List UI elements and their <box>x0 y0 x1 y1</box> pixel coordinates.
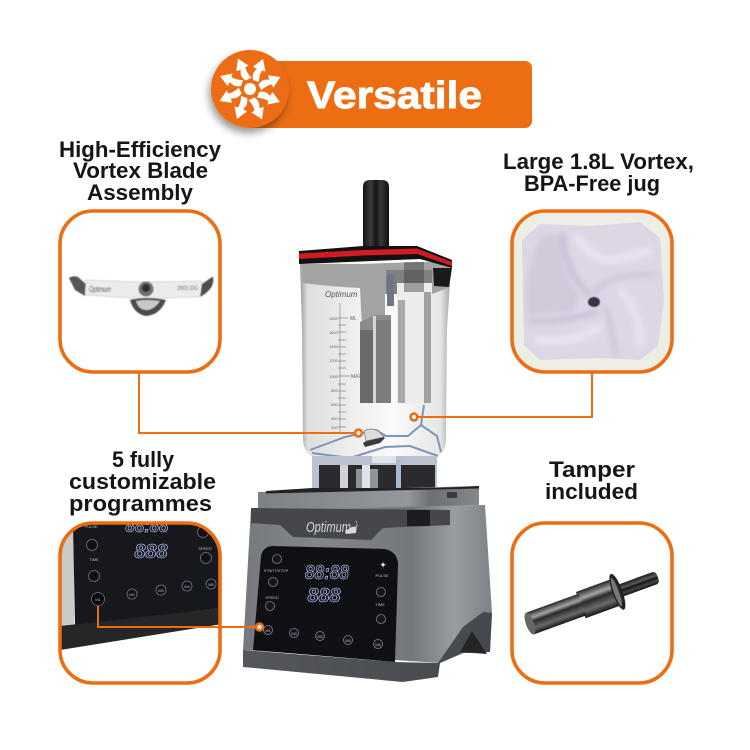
heading: blade <box>59 137 222 205</box>
panel frame: jug <box>512 211 672 372</box>
measuring scale: 200 <box>331 425 338 430</box>
measuring scale: ML <box>350 316 357 322</box>
jug <box>299 246 452 488</box>
jug base collar <box>312 456 437 488</box>
connector: programmes <box>98 606 256 627</box>
heading: programmes: programmes <box>69 491 212 516</box>
panel: tamper <box>512 457 672 683</box>
close-up labels: TIME <box>89 557 99 562</box>
close-up labels <box>84 524 215 602</box>
panel labels: M3 <box>317 634 324 639</box>
panel labels: M1 <box>265 628 272 633</box>
base logo: Optimum <box>306 519 351 536</box>
close-up labels: M4 <box>184 584 191 589</box>
base skirt <box>243 612 492 682</box>
blender product <box>243 180 492 682</box>
measuring scale: MAX <box>351 374 362 380</box>
jug bottom and blade <box>310 405 441 458</box>
image: vortex <box>512 211 672 372</box>
measuring scale: 1800 <box>329 316 339 321</box>
dark logo band <box>251 508 450 540</box>
connector: blade <box>139 372 355 433</box>
panel labels: M4 <box>345 638 352 643</box>
close-up labels: M3 <box>158 588 165 593</box>
panel labels: PULSE <box>375 573 389 578</box>
control panel <box>253 546 398 662</box>
heading: programmes <box>69 447 216 516</box>
title banner <box>211 50 532 128</box>
central baffle <box>360 315 391 403</box>
speed display: 888 <box>308 585 341 607</box>
close-up leader <box>98 606 230 627</box>
heading: blade: High-Efficiency <box>59 137 222 162</box>
image: blade <box>69 276 213 316</box>
panel: jug vortex <box>503 149 694 372</box>
measuring scale: 1000 <box>329 374 339 379</box>
panel labels: M5 <box>375 642 382 647</box>
panel frame: tamper <box>512 523 672 683</box>
panel frame: blade <box>60 211 220 372</box>
close-up labels: M1 <box>95 597 102 602</box>
panel labels: SPEED <box>265 595 279 600</box>
measuring scale: 1200 <box>329 358 339 363</box>
panel labels: START/STOP <box>264 568 289 573</box>
measuring scale: 800 <box>331 388 338 393</box>
heading: programmes: 5 fully <box>112 447 175 472</box>
image: control panel close-up: 888 <box>134 541 168 563</box>
connector lines <box>98 372 592 627</box>
heading: blade: Assembly <box>87 180 194 205</box>
heading: jug: BPA-Free jug <box>524 171 660 196</box>
measuring scale: 1600 <box>329 330 339 335</box>
banner bar <box>245 61 532 128</box>
swirl folds <box>526 234 655 355</box>
panel: programmes <box>60 447 230 683</box>
close-up labels: SPEED <box>198 546 212 551</box>
jug logo: Optimum <box>325 290 358 299</box>
collar notch <box>447 492 457 498</box>
icon: vortex arrows badge <box>211 50 289 128</box>
base body <box>243 505 492 663</box>
close-up displays: 88:88 <box>126 516 169 537</box>
measuring scale: 400 <box>331 416 338 421</box>
image: control panel close-up <box>60 516 222 650</box>
close-up buttons <box>86 526 216 606</box>
heading: blade: Vortex Blade <box>73 158 208 183</box>
panel labels <box>264 560 389 647</box>
heading: Versatile <box>307 75 482 117</box>
jug body <box>300 262 451 456</box>
image: blade: Optimum <box>89 285 111 294</box>
close-up labels: M5 <box>208 582 215 587</box>
timer display: 88:88 <box>305 562 350 584</box>
motor base <box>243 486 492 682</box>
measuring scale <box>329 303 362 433</box>
panel: blade assembly <box>59 137 222 372</box>
base collar <box>258 486 479 510</box>
connector: jug <box>418 372 592 417</box>
heading: tamper: Tamper <box>549 457 635 482</box>
panel buttons <box>264 554 386 648</box>
close-up labels: M2 <box>129 592 136 597</box>
heading: jug <box>503 149 694 196</box>
lid <box>299 246 452 287</box>
heading: tamper <box>545 457 638 504</box>
heading: jug: Large 1.8L Vortex, <box>503 149 694 174</box>
jug upper shade <box>302 262 449 330</box>
connector dots <box>256 414 417 630</box>
measuring scale: 1400 <box>329 344 339 349</box>
pouring column <box>386 262 432 403</box>
image: tamper tool <box>520 559 664 643</box>
close-up labels: PULSE <box>84 524 98 529</box>
heading: tamper: included <box>545 479 638 504</box>
panel labels: M2 <box>291 631 298 636</box>
skirt recess <box>460 631 487 654</box>
tamper handle <box>363 180 389 246</box>
panel frame: programmes <box>60 523 220 683</box>
panel labels: TIME <box>375 602 385 607</box>
heading: programmes: customizable <box>69 469 216 494</box>
image: blade: 2601-DG <box>177 286 198 292</box>
measuring scale: 600 <box>331 402 338 407</box>
panel labels: ✦ <box>379 560 387 570</box>
